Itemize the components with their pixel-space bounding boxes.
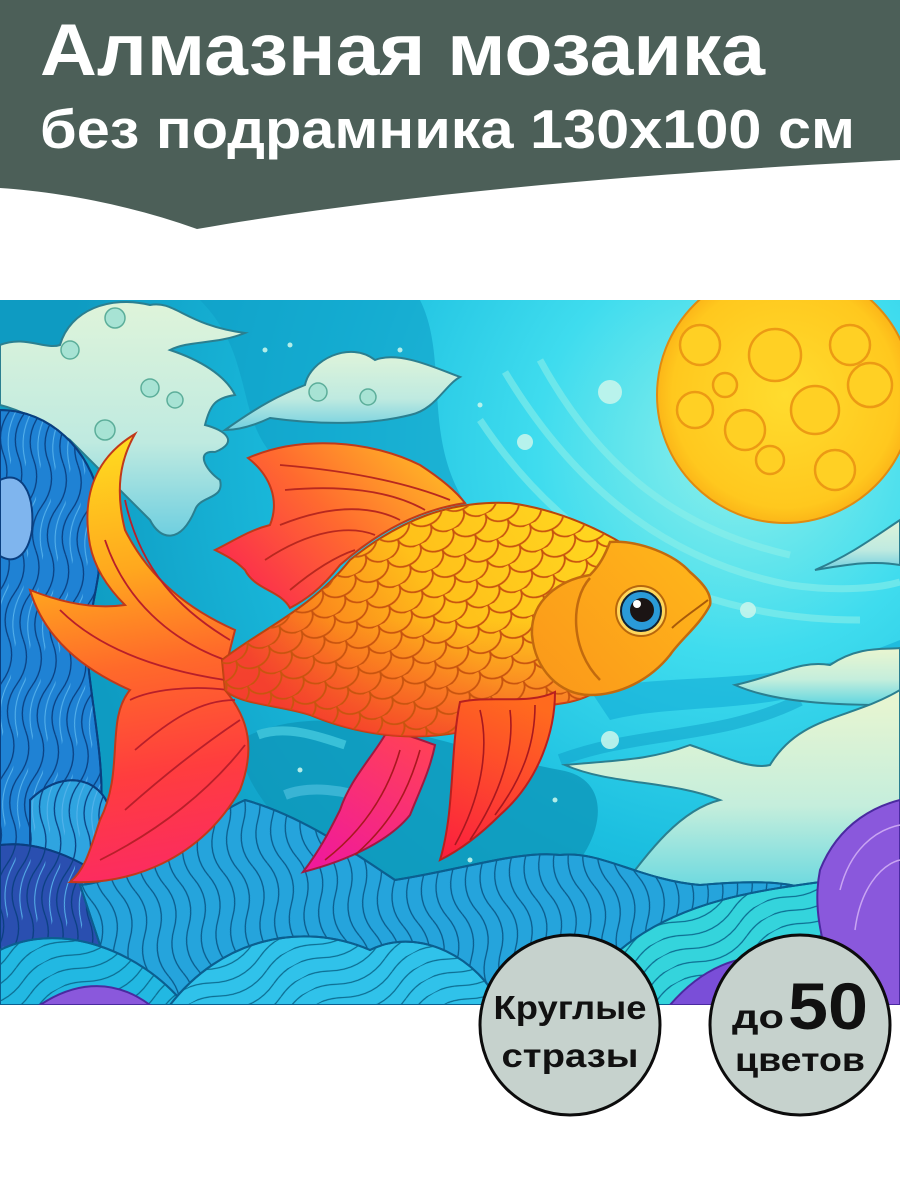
badge: up to 50 colors: цветов [735, 1041, 865, 1078]
clouds upper left [0, 302, 900, 570]
fish [30, 434, 710, 882]
fish eye [616, 586, 666, 636]
fish head [532, 542, 710, 695]
illustration: goldfish picture [0, 267, 900, 1005]
waves bottom [0, 800, 835, 1005]
heading: title line 2: без подрамника 130х100 см [40, 98, 855, 160]
header banner [0, 0, 900, 229]
badge: round rhinestones [480, 935, 660, 1115]
fish ventral fin [303, 734, 435, 872]
badge: up to 50 colors: 50 [788, 969, 868, 1043]
fish body [222, 503, 639, 736]
clouds lower right [565, 648, 900, 900]
fish dorsal fin [215, 443, 465, 608]
heading: title line 1: Алмазная мозаика [40, 10, 767, 91]
badge: round rhinestones: Круглые [494, 989, 646, 1026]
badge: up to 50 colors [710, 935, 890, 1115]
fish tail [30, 434, 248, 882]
fish pectoral fin [440, 692, 555, 860]
badge: round rhinestones: стразы [502, 1037, 638, 1074]
icon: moon [656, 300, 900, 524]
badge: up to 50 colors: до [732, 998, 784, 1035]
waves purple [40, 800, 900, 1005]
waves left [0, 409, 107, 949]
bubbles [237, 342, 756, 862]
